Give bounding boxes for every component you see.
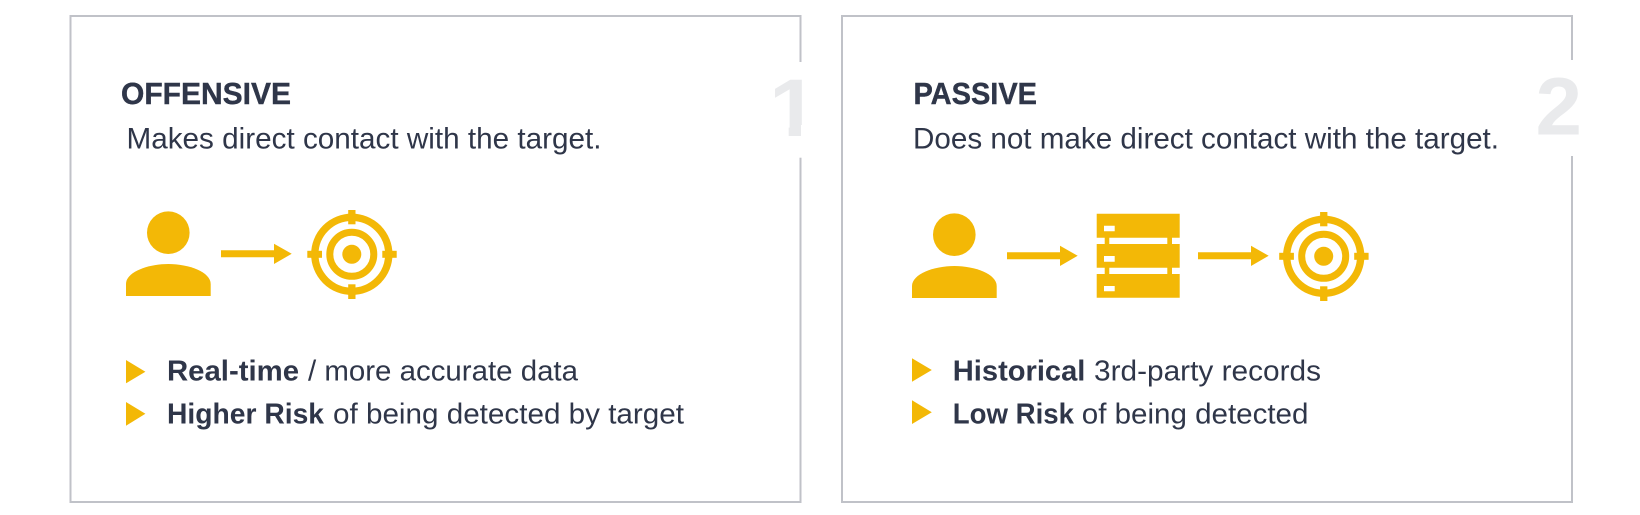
icon: target xyxy=(307,210,397,299)
arrow: server to target xyxy=(1198,246,1269,266)
bullet: low risk xyxy=(912,398,1308,430)
icon: server stack xyxy=(1097,214,1180,298)
arrow: person to target xyxy=(221,244,292,264)
panel number 1: 1 xyxy=(769,63,818,154)
bullet: low risk: Low Risk xyxy=(953,398,1075,430)
heading: offensive: OFFENSIVE xyxy=(121,77,291,111)
description: Makes direct contact with the target. xyxy=(126,122,602,156)
bullet: low risk: of being detected xyxy=(1082,398,1308,430)
arrow: person to server xyxy=(1007,246,1078,266)
panel: passive xyxy=(842,16,1582,502)
panel border xyxy=(70,16,800,502)
heading: passive: PASSIVE xyxy=(914,77,1037,111)
bullet: real-time: Real-time xyxy=(167,356,299,388)
bullet: historical xyxy=(912,356,1321,388)
icon: person xyxy=(126,211,211,296)
panel: offensive xyxy=(70,16,819,502)
bullet: higher risk: Higher Risk xyxy=(167,398,325,430)
bullet: higher risk xyxy=(126,398,684,430)
bullet: real-time: / more accurate data xyxy=(308,356,579,388)
bullet: historical: 3rd-party records xyxy=(1094,356,1321,388)
panel border xyxy=(842,16,1572,502)
icon: target xyxy=(1279,212,1369,301)
bullet: historical: Historical xyxy=(953,356,1085,388)
bullet: real-time xyxy=(126,356,579,388)
panel number 2: 2 xyxy=(1536,61,1582,152)
bullet: higher risk: of being detected by target xyxy=(333,398,684,430)
description: Does not make direct contact with the target. xyxy=(913,122,1499,156)
icon: person xyxy=(912,213,997,298)
